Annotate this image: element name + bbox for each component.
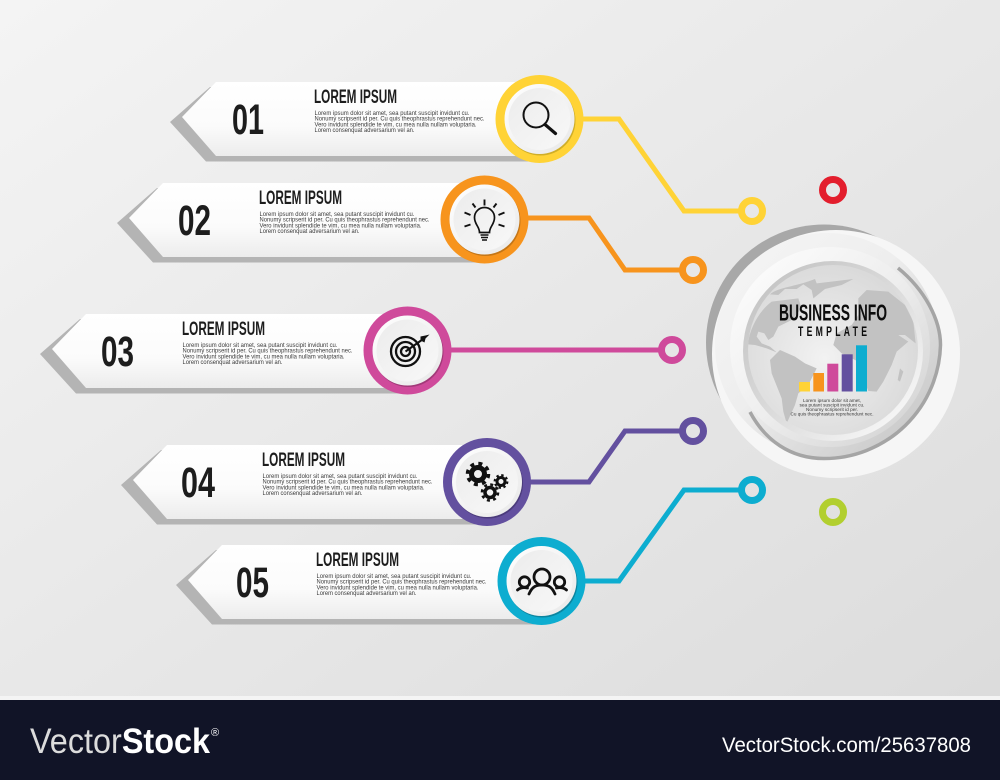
- number 02: 02: [178, 197, 211, 245]
- icon button: target: [364, 306, 452, 394]
- body text 4: [262, 474, 433, 497]
- body text 2: Nonumy scripserit id per. Cu quis theophrastus reprehendunt nec.: [260, 218, 430, 224]
- registered mark: ®: [211, 727, 219, 739]
- icon button: light bulb: [440, 176, 528, 264]
- decorative ring: green: [822, 502, 844, 522]
- body text 2: Lorem consenquat adversarium vel an.: [260, 229, 360, 235]
- banner 3 shape: [40, 314, 405, 394]
- body text 1: Lorem ipsum dolor sit amet, sea putant suscipit invidunt cu.: [314, 111, 470, 117]
- banner 5 shape: [176, 545, 541, 624]
- body text 1: [314, 111, 485, 134]
- body text 4: Nonumy scripserit id per. Cu quis theophrastus reprehendunt nec.: [262, 480, 433, 486]
- body text 3: Vero invidunt splendide te vim, cu mea nulla nullam voluptaria.: [182, 354, 345, 360]
- icon button: people: [498, 537, 586, 625]
- badge subtitle: TEMPLATE: [798, 324, 870, 340]
- body text 5: Lorem ipsum dolor sit amet, sea putant suscipit invidunt cu.: [316, 574, 472, 580]
- heading 4: LOREM IPSUM: [262, 449, 345, 471]
- body text 3: [182, 343, 353, 366]
- body text 5: Lorem consenquat adversarium vel an.: [316, 591, 417, 597]
- icon button: gears: [443, 438, 531, 526]
- number 03: 03: [101, 328, 134, 376]
- badge caption: Cu quis theophrastus reprehendunt nec.: [790, 412, 874, 418]
- body text 4: Lorem consenquat adversarium vel an.: [262, 491, 363, 497]
- badge layered discs: [706, 224, 960, 478]
- body text 1: Vero invidunt splendide te vim, cu mea nulla nullam voluptaria.: [314, 122, 477, 128]
- body text 5: [316, 574, 487, 597]
- connector line 2: [525, 218, 704, 280]
- body text 4: Vero invidunt splendide te vim, cu mea nulla nullam voluptaria.: [262, 485, 425, 491]
- banner 5: [176, 537, 586, 625]
- body text 4: Lorem ipsum dolor sit amet, sea putant suscipit invidunt cu.: [262, 474, 418, 480]
- body text 2: Vero invidunt splendide te vim, cu mea nulla nullam voluptaria.: [260, 223, 422, 229]
- heading 3: LOREM IPSUM: [182, 318, 265, 340]
- decorative ring: red: [822, 180, 844, 200]
- body text 5: Vero invidunt splendide te vim, cu mea nulla nullam voluptaria.: [316, 585, 479, 591]
- badge caption: Nonumy scripserit id per.: [806, 407, 858, 413]
- banner 1: [170, 75, 584, 163]
- banner 4 shape: [121, 445, 486, 524]
- bottom white strip: [0, 696, 1000, 700]
- body text 3: Nonumy scripserit id per. Cu quis theophrastus reprehendunt nec.: [182, 349, 353, 355]
- body text 2: Lorem ipsum dolor sit amet, sea putant suscipit invidunt cu.: [260, 212, 415, 218]
- connector line 4: [528, 420, 704, 482]
- world map: [748, 279, 916, 423]
- bar chart: [799, 345, 867, 392]
- banner 1 shape: [170, 82, 535, 162]
- badge caption: [790, 398, 874, 418]
- connector line 3: [448, 340, 682, 360]
- body text 1: Nonumy scripserit id per. Cu quis theophrastus reprehendunt nec.: [314, 117, 485, 123]
- footer id: VectorStock.com/25637808: [722, 734, 971, 757]
- connector line 5: [582, 480, 762, 581]
- number 04: 04: [181, 459, 215, 507]
- body text 1: Lorem consenquat adversarium vel an.: [314, 128, 415, 134]
- banner 3: [40, 306, 452, 394]
- footer logo: VectorStock: [30, 722, 210, 761]
- icon button: search: [496, 75, 584, 163]
- badge caption: Lorem ipsum dolor sit amet,: [803, 398, 861, 404]
- heading 2: LOREM IPSUM: [259, 187, 342, 209]
- body text 3: Lorem consenquat adversarium vel an.: [182, 360, 283, 366]
- badge caption: sea putant suscipit invidunt cu.: [800, 402, 864, 408]
- connector line 1: [580, 119, 762, 222]
- body text 3: Lorem ipsum dolor sit amet, sea putant suscipit invidunt cu.: [182, 343, 338, 349]
- central globe badge: [706, 224, 960, 478]
- footer bar: [0, 700, 1000, 780]
- body text 2: [260, 212, 430, 235]
- heading 5: LOREM IPSUM: [316, 549, 399, 571]
- banner 4: [121, 438, 531, 526]
- body text 5: Nonumy scripserit id per. Cu quis theophrastus reprehendunt nec.: [316, 580, 487, 586]
- number 01: 01: [232, 96, 264, 144]
- banner 2 shape: [117, 183, 482, 262]
- number 05: 05: [236, 559, 269, 607]
- banner 2: [117, 176, 528, 264]
- badge title: BUSINESS INFO: [779, 300, 887, 326]
- heading 1: LOREM IPSUM: [314, 86, 397, 108]
